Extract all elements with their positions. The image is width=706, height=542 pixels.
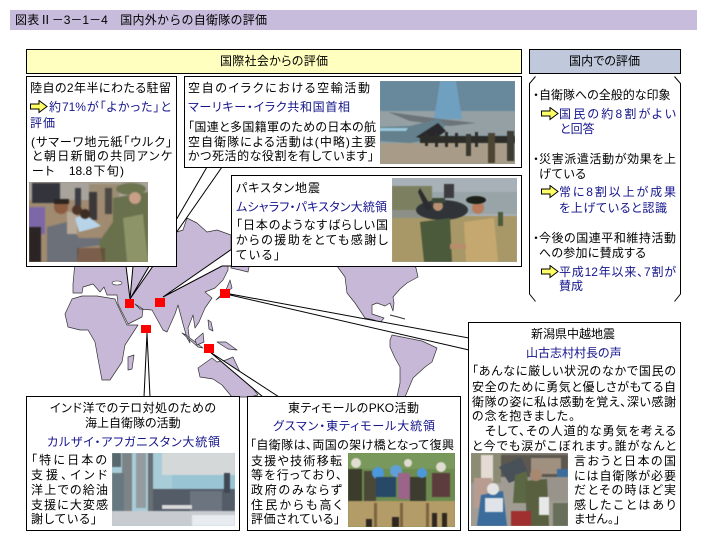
panel: East Timor PKO activity: 「自衛隊は、両国の架け橋となって復興 [250,438,454,452]
bracket frame [529,76,681,302]
heading: domestic evaluation [529,49,681,74]
panel: Niigata Chuetsu earthquake: そして、その人道的な勇気を考える [485,424,676,438]
panel: Niigata Chuetsu earthquake: と今でも涙がこぼれます。誰がなんと [472,439,676,453]
panel: Air SDF in Iraq: かつ死活的な役割を有しています」 [188,149,374,163]
panel: East Timor PKO activity: 住民からも高く [251,498,342,512]
panel: domestic evaluation [529,76,681,302]
panel: Ground SDF stay in Samawah: 評価 [30,116,55,130]
panel: domestic evaluation: 平成12年以来、7割が [559,265,676,279]
photo: refuelling ship [112,453,235,526]
photo: rescue workers at disaster site [471,453,568,526]
panel: domestic evaluation: ・ [530,88,542,102]
panel: East Timor PKO activity: 政府のみならず [251,483,342,497]
panel: Indian Ocean anti-terror activity: 「特に日本の [31,453,107,467]
panel: Indian Ocean anti-terror activity: 支援に大変感 [31,498,108,512]
panel: domestic evaluation: げている [539,167,586,181]
leader: Samawah [126,266,133,299]
panel: Air SDF in Iraq: 空自のイラクにおける空輸活動 [188,81,370,95]
panel: Ground SDF stay in Samawah: と朝日新聞の共同アンケ [32,149,172,163]
panel: Pakistan earthquake [231,175,522,267]
leader: Indian Ocean [144,333,150,397]
leader: East Timor [210,352,279,397]
panel: Niigata Chuetsu earthquake: には自衛隊が必要 [574,469,676,483]
panel: domestic evaluation: ・ [530,152,542,166]
location marker: Iraq [125,299,134,308]
panel: Ground SDF stay in Samawah: 約71%が「よかった」と [49,100,171,114]
panel: Indian Ocean anti-terror activity: 海上自衛隊の活動 [85,416,181,430]
panel: Pakistan earthquake: 「日本のようなすばらしい国 [236,218,388,232]
panel: domestic evaluation: 自衛隊への全般的な印象 [539,88,671,102]
panel: Indian Ocean anti-terror activity: 支援、インド [31,468,107,482]
panel: domestic evaluation: 今後の国連平和維持活動 [539,231,676,245]
photo: soldier shaking hands with children [29,182,148,262]
location marker: East Timor [204,344,214,353]
panel: domestic evaluation: ・ [530,231,542,245]
photo: transport aircraft and troops [380,81,515,164]
panel: domestic evaluation: 国民の約8割がよい [559,107,676,121]
panel: Ground SDF stay in Samawah: ート 18.8下旬) [32,164,124,178]
leader: Niigata [230,294,469,350]
heading: international evaluation [26,49,522,74]
panel: East Timor PKO activity: 評価されている」 [251,512,340,526]
panel: Ground SDF stay in Samawah: (サマーワ地元紙「ウルク」 [31,135,172,149]
panel: domestic evaluation: を上げていると認識 [559,201,667,215]
title text: 図表Ⅱ－3－1－4 国内外からの自衛隊の評価 [15,13,267,27]
icon: arrow [541,265,559,278]
leader: Pakistan earthquake [163,249,232,297]
panel: Niigata Chuetsu earthquake: 山古志村村長の声 [526,346,622,360]
panel: Pakistan earthquake: ムシャラフ・パキスタン大統領 [236,200,387,214]
icon: arrow [30,100,48,114]
panel: Air SDF in Iraq: 空自衛隊による活動は(中略)主要 [188,135,376,149]
heading: international evaluation: 国際社会からの評価 [220,54,328,68]
panel: Niigata Chuetsu earthquake: 「あんなに厳しい状況のなかで国民の [472,364,676,378]
panel: Ground SDF stay in Samawah [26,76,177,267]
panel: Indian Ocean anti-terror activity: 謝している」 [31,512,97,526]
panel: Ground SDF stay in Samawah: 陸自の2年半にわたる駐留 [30,81,171,95]
panel: Pakistan earthquake: ている」 [236,248,280,262]
leader: Iraq air transport [130,167,222,299]
icon: arrow [541,185,559,198]
panel: East Timor PKO activity: 等を行っており、 [251,468,342,482]
panel: domestic evaluation: への参加に賛成する [539,246,646,260]
panel: East Timor PKO activity [247,396,461,531]
panel: Indian Ocean anti-terror activity: カルザイ・アフガニスタン大統領 [47,435,220,449]
panel: Niigata Chuetsu earthquake: 新潟県中越地震 [531,327,615,341]
panel: Indian Ocean anti-terror activity [26,396,240,531]
title bar [10,10,697,30]
photo: workers building a timber wall [348,453,455,527]
panel: Niigata Chuetsu earthquake: 感したことはあり [574,498,676,512]
panel: Air SDF in Iraq: 「国連と多国籍軍のための日本の航 [188,120,376,134]
panel: Pakistan earthquake: からの援助をとても感謝し [236,233,388,247]
heading: domestic evaluation: 国内での評価 [569,54,640,68]
panel: domestic evaluation: 賛成 [559,279,583,293]
panel: East Timor PKO activity: 支援や技術移転 [251,454,342,468]
panel: East Timor PKO activity: 東ティモールのPKO活動 [288,401,419,415]
panel: domestic evaluation: 災害派遣活動が効果を上 [539,152,676,166]
panel: Indian Ocean anti-terror activity: インド洋でのテロ対処のための [50,401,216,415]
panel: Niigata Chuetsu earthquake: 言おうと日本の国 [574,454,676,468]
panel: domestic evaluation: 常に8割以上が成果 [559,185,676,199]
location marker: Pakistan [155,298,165,307]
panel: Niigata Chuetsu earthquake: 安全のために勇気と優しさがもてる自 [472,380,676,394]
panel: East Timor PKO activity: グスマン・東ティモール大統領 [273,419,435,433]
panel: Niigata Chuetsu earthquake: だとその時ほど実 [574,483,676,497]
location marker: Niigata [220,289,230,298]
photo: two officers shaking hands [392,178,517,262]
icon: arrow [541,107,559,120]
panel: Niigata Chuetsu earthquake: 衛隊の姿に私は感動を覚え、深い感謝 [472,395,676,409]
panel: domestic evaluation: と回答 [560,122,595,136]
panel: Air SDF in Iraq [184,76,522,168]
panel: Niigata Chuetsu earthquake: ません。」 [574,512,620,526]
panel: Niigata Chuetsu earthquake [468,322,681,531]
panel: Niigata Chuetsu earthquake: の念を抱きました。 [472,409,575,423]
location marker: Indian Ocean [141,325,151,333]
panel: Indian Ocean anti-terror activity: 洋上での給油 [31,483,108,497]
panel: Air SDF in Iraq: マーリキー・イラク共和国首相 [188,100,350,114]
panel: Pakistan earthquake: パキスタン地震 [236,181,320,195]
